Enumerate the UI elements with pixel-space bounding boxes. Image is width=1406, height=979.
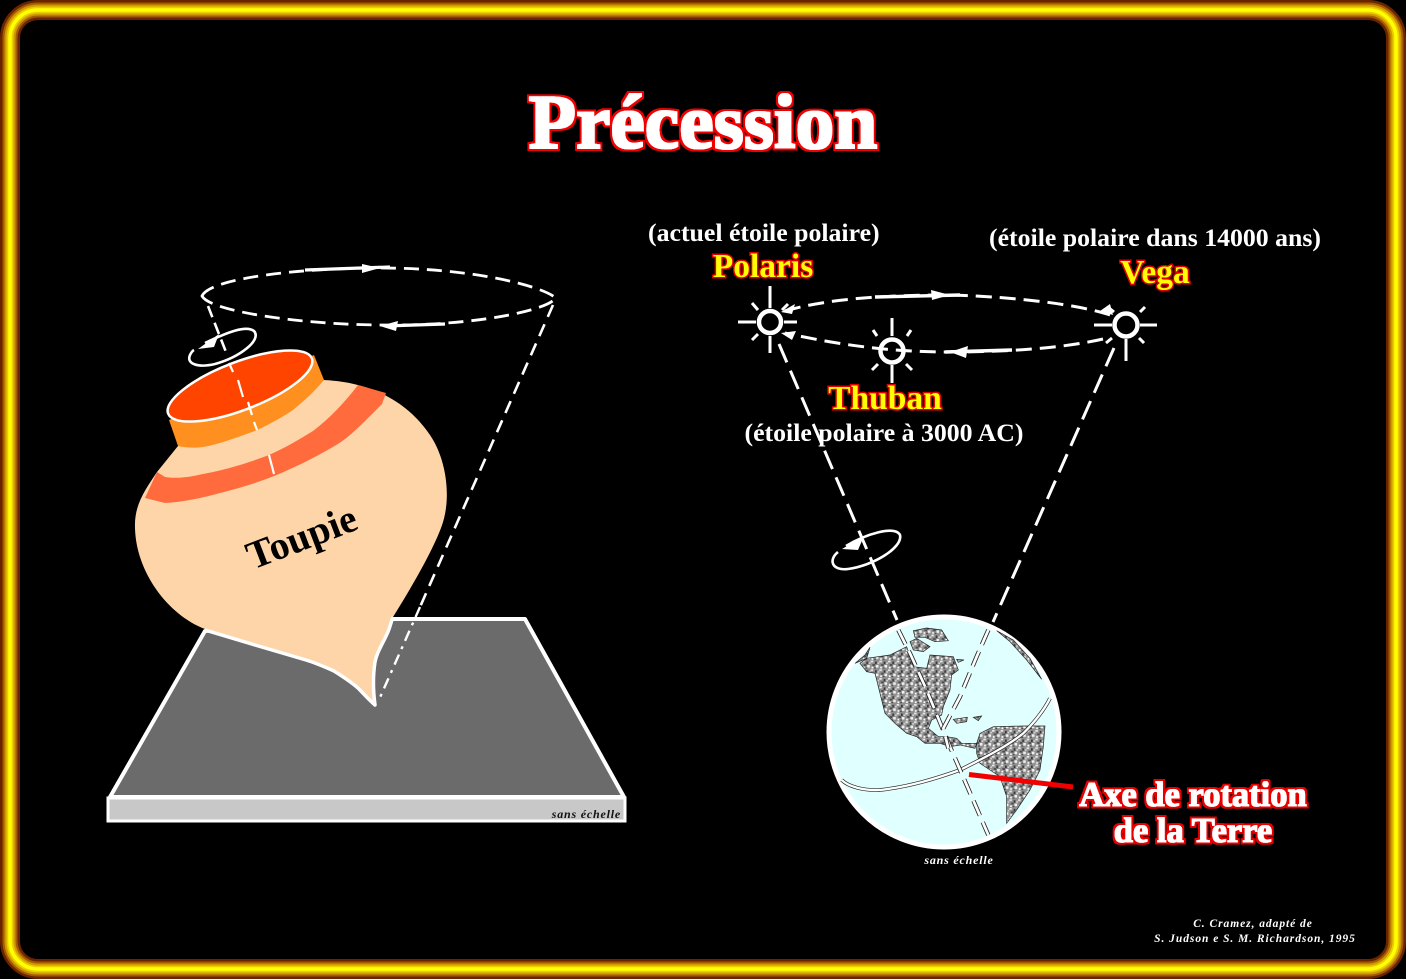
star: Vega: [1094, 307, 1157, 361]
equator: [842, 698, 1050, 790]
right axis line: [993, 348, 1114, 622]
label: Earth rotation axis: [1079, 776, 1307, 850]
top outline: [205, 617, 393, 705]
title: Précession: [529, 79, 877, 165]
top axis marks: [229, 363, 274, 474]
label: Thuban: Thuban: [828, 380, 942, 417]
top band: [145, 385, 386, 503]
panel: spinning top: [108, 336, 625, 821]
credit: S. Judson e S. M. Richardson, 1995: [1154, 933, 1356, 945]
collar rim: [169, 355, 324, 448]
top body: [135, 380, 447, 705]
credit: C. Cramez, adapté de: [1193, 918, 1313, 930]
label: Thuban note: (étoile polaire à 3000 AC): [745, 418, 1023, 447]
precession cone, spinning top: [189, 264, 556, 702]
dashed orbit ellipse: [785, 295, 1110, 352]
left axis: [208, 306, 226, 352]
left axis line: [779, 344, 897, 620]
scale note: sans échelle: [551, 807, 621, 821]
North America: [860, 647, 977, 748]
globe disc: [829, 617, 1059, 847]
Arctic islands: [910, 638, 982, 723]
panel: stars: [648, 218, 1321, 447]
label: Toupie: Toupie: [240, 496, 363, 578]
Earth axis cone: [779, 344, 1114, 622]
axis on globe: [898, 630, 988, 835]
right cone line: [420, 305, 553, 607]
table top: [110, 619, 624, 797]
spin arrow: [189, 329, 256, 366]
Alaska tip: [855, 647, 870, 663]
red pointer: [969, 774, 1073, 787]
scale note: sans échelle: [923, 853, 994, 867]
orbit solid segments: [875, 295, 1012, 352]
label: Vega note: (étoile polaire dans 14000 ans): [989, 223, 1321, 252]
star: Polaris: [738, 286, 797, 353]
label: Earth rotation axis: de la Terre: [1114, 812, 1272, 850]
dashed ellipse: [202, 268, 556, 325]
globe: [829, 617, 1073, 867]
arrows: [362, 264, 398, 331]
Europe edge: [997, 631, 1042, 679]
label: Earth rotation axis: Axe de rotation: [1079, 776, 1307, 814]
Greenland: [913, 628, 948, 642]
label: Vega: Vega: [1120, 254, 1190, 291]
label: Polaris: Polaris: [713, 248, 813, 285]
orbit arrows: [931, 290, 968, 358]
dash-dot on table: [378, 607, 420, 702]
ellipse solid segments: [305, 267, 445, 326]
table edge: [108, 798, 625, 821]
star: Thuban: [872, 318, 912, 383]
continents: [855, 628, 1045, 823]
credit: [1154, 918, 1356, 945]
Earth spin arrow: [833, 531, 900, 569]
label: Polaris note: (actuel étoile polaire): [648, 218, 880, 247]
South America: [977, 726, 1045, 823]
collar top: [160, 336, 320, 436]
